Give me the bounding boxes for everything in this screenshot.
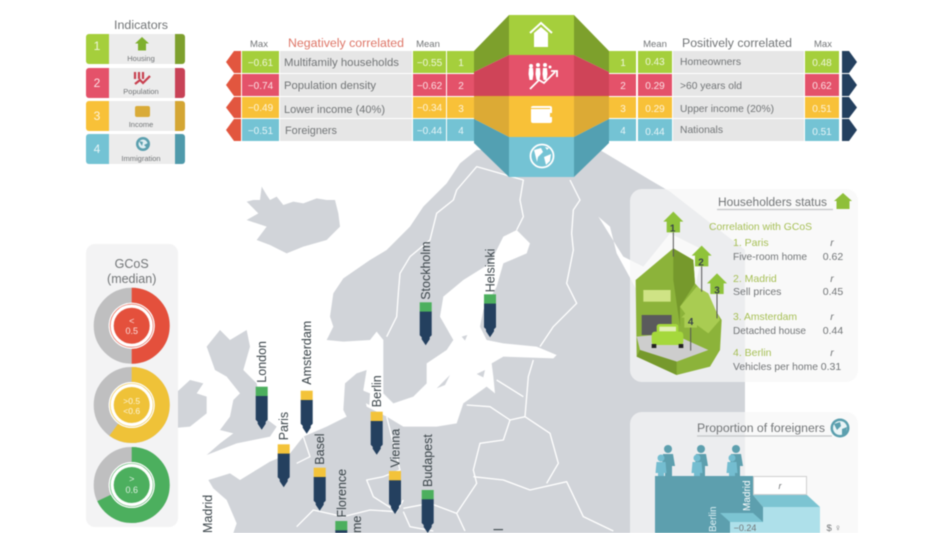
mean values: 0.43 (645, 57, 665, 68)
mean values: −0.62 (417, 81, 443, 92)
correlation list: r (830, 237, 834, 249)
pin: Stockholm: Stockholm (419, 241, 433, 300)
label: city name cut by the lower edge: l (492, 528, 506, 531)
panel: GCoS median (86, 244, 178, 527)
pin: London: London (255, 341, 269, 383)
map: Ireland (170, 380, 207, 428)
donut: 0.5 to 0.6 (101, 374, 162, 436)
positive labels: Upper income (20%) (680, 103, 774, 115)
mean values: −0.34 (417, 103, 443, 114)
pin: Amsterdam: Amsterdam (300, 321, 314, 385)
pin: Berlin (370, 375, 384, 455)
label: Madrid: Madrid (201, 495, 215, 533)
illustration: house: 3 (714, 285, 720, 296)
map: Iceland (247, 187, 340, 253)
map: islands (360, 335, 485, 405)
correlation list: 0.44 (823, 325, 843, 337)
r header cell: r (778, 481, 782, 491)
pin: Helsinki: Helsinki (484, 249, 498, 292)
correlation list: 3. Amsterdam (733, 311, 797, 323)
donut: below 0.5: 0.5 (125, 326, 138, 336)
map: mainland (208, 150, 745, 533)
negative labels: Multifamily households (284, 57, 400, 69)
header: mean: Mean (416, 39, 440, 50)
GCoS heading: GCoS (115, 257, 149, 271)
pin: Vienna (388, 429, 402, 514)
pin: Helsinki (484, 249, 498, 337)
correlation list: r (830, 273, 834, 285)
correlation list (733, 237, 843, 373)
max values: −0.61 (248, 58, 274, 69)
header: max: Max (814, 39, 832, 50)
label cells (280, 51, 412, 141)
value: -0.24: −0.24 (734, 523, 756, 533)
pin: Stockholm (419, 241, 433, 345)
max values: 0.51 (812, 104, 832, 115)
legend row: income: Income (129, 120, 153, 129)
pin: Paris: Paris (277, 412, 291, 440)
illustration: house: 2 (698, 258, 704, 269)
stepped bar chart (655, 476, 842, 533)
row numbers left: 4 (458, 126, 464, 137)
donut: below 0.5 (101, 295, 162, 356)
legend row: housing (86, 34, 185, 64)
pin: Paris (277, 412, 291, 487)
icon: green house (834, 193, 852, 209)
mean values (638, 51, 672, 141)
legend row: housing: 1 (94, 39, 101, 53)
illustration: house (636, 212, 727, 375)
mean values: −0.55 (417, 58, 443, 69)
correlation list: 0.31 (821, 361, 841, 373)
row numbers left (447, 51, 475, 141)
donut: above 0.6: 0.6 (125, 485, 138, 495)
map: borders (297, 167, 613, 531)
foreigners heading: Proportion of foreigners (697, 423, 825, 435)
city pins (201, 241, 506, 533)
row numbers left: 1 (458, 58, 464, 69)
label: Berlin: Berlin (708, 506, 719, 532)
correlation list: 0.62 (823, 251, 843, 263)
donut: above 0.6 (101, 454, 162, 516)
donut: 0.5 to 0.6: >0.5 (123, 396, 140, 406)
max values (805, 51, 839, 141)
legend row: immigration (86, 134, 185, 164)
legend row: immigration: 4 (94, 142, 101, 156)
map: White Sea (598, 217, 703, 313)
label: Madrid: Madrid (742, 480, 753, 511)
pin: Florence: Florence (335, 469, 349, 518)
label: Rome, cut by the lower edge: me (350, 516, 364, 533)
positive labels: Nationals (680, 124, 723, 136)
max values: 0.51 (812, 127, 832, 138)
panel: householders status (630, 189, 858, 382)
icon: wallet (531, 106, 552, 123)
max values (242, 51, 279, 141)
negative labels: Population density (284, 80, 377, 92)
pin: Budapest: Budapest (421, 434, 435, 487)
correlation list: Vehicles per home (733, 361, 818, 373)
mean values (413, 51, 446, 141)
label cells (673, 51, 804, 141)
header: max: Max (250, 39, 268, 50)
positively correlated table (609, 38, 857, 141)
correlation list: 0.45 (823, 286, 843, 298)
mean values: −0.44 (417, 126, 443, 137)
people icons (656, 445, 743, 482)
max values: −0.49 (248, 103, 274, 114)
arrows: red tags (226, 51, 241, 141)
r header cell (754, 476, 806, 494)
donut: below 0.5: < (129, 316, 134, 326)
row numbers right (609, 51, 636, 141)
arrows: navy tags (842, 51, 857, 141)
correlation list: r (830, 347, 834, 359)
row numbers right: 2 (620, 81, 626, 92)
illustration: house: 1 (670, 224, 676, 235)
illustration: house: 4 (688, 317, 694, 328)
pin: Berlin: Berlin (370, 375, 384, 407)
icon: house (530, 23, 552, 47)
legend row: income: 3 (94, 109, 101, 123)
map: Great Britain (207, 330, 277, 455)
central octagon (474, 15, 609, 177)
correlation list: 2. Madrid (733, 273, 777, 285)
header: negatively correlated: Negatively correlated (288, 38, 404, 50)
correlation list: 4. Berlin (733, 347, 772, 359)
legend title: Indicators (114, 20, 168, 32)
header: mean: Mean (643, 39, 667, 50)
negative labels: Lower income (40%) (284, 104, 385, 116)
pin: Basel: Basel (313, 433, 327, 465)
donut: 0.5 to 0.6: <0.6 (123, 406, 140, 416)
legend row: population: Population (123, 87, 159, 96)
positive labels: Homeowners (680, 56, 741, 68)
max values: −0.74 (248, 81, 274, 92)
correlation subtitle: Correlation with GCoS (709, 221, 812, 233)
mean values: 0.44 (645, 127, 665, 138)
legend row: income (86, 101, 185, 131)
pin: Budapest (421, 434, 435, 533)
max values: −0.51 (248, 126, 274, 137)
pin: London (255, 341, 269, 430)
row numbers left: 3 (458, 104, 464, 115)
legend row: population: 2 (94, 76, 101, 90)
octagon right facets (574, 15, 609, 177)
icon: teal globe (830, 418, 850, 438)
householders heading: Householders status (718, 197, 827, 209)
correlation list: Detached house (733, 325, 806, 337)
mean values: 0.29 (645, 104, 665, 115)
octagon centre bands (509, 15, 574, 177)
correlation list: 1. Paris (733, 237, 769, 249)
row numbers right: 1 (620, 58, 626, 69)
negative labels: Foreigners (285, 125, 337, 137)
legend row: housing: Housing (127, 54, 155, 63)
GCoS heading: (median) (107, 272, 156, 286)
max values: 0.62 (812, 81, 832, 92)
pin: Amsterdam (300, 321, 314, 434)
pin: Basel (313, 433, 327, 511)
panel: proportion of foreigners (630, 412, 858, 533)
positive labels (680, 56, 774, 136)
mean values: 0.29 (645, 81, 665, 92)
correlation list: Five-room home (733, 251, 807, 263)
correlation list: r (830, 311, 834, 323)
donut: above 0.6: > (129, 474, 134, 484)
negatively correlated table (226, 38, 475, 141)
negative labels (284, 57, 400, 137)
correlation list: Sell prices (733, 286, 781, 298)
legend row: population (86, 68, 185, 98)
row numbers right: 4 (620, 126, 626, 137)
map of Europe (170, 150, 745, 533)
positive labels: >60 years old (680, 80, 742, 92)
header: positively correlated: Positively correlated (682, 38, 792, 50)
row numbers right: 3 (620, 104, 626, 115)
indicators legend (86, 20, 185, 164)
octagon left facets (474, 15, 509, 177)
pin: Vienna: Vienna (388, 429, 402, 468)
max values: 0.48 (812, 58, 832, 69)
icon: people and rising arrow (528, 63, 557, 89)
row numbers left: 2 (458, 81, 464, 92)
legend row: immigration: Immigration (121, 154, 161, 163)
icon: globe (530, 144, 554, 168)
